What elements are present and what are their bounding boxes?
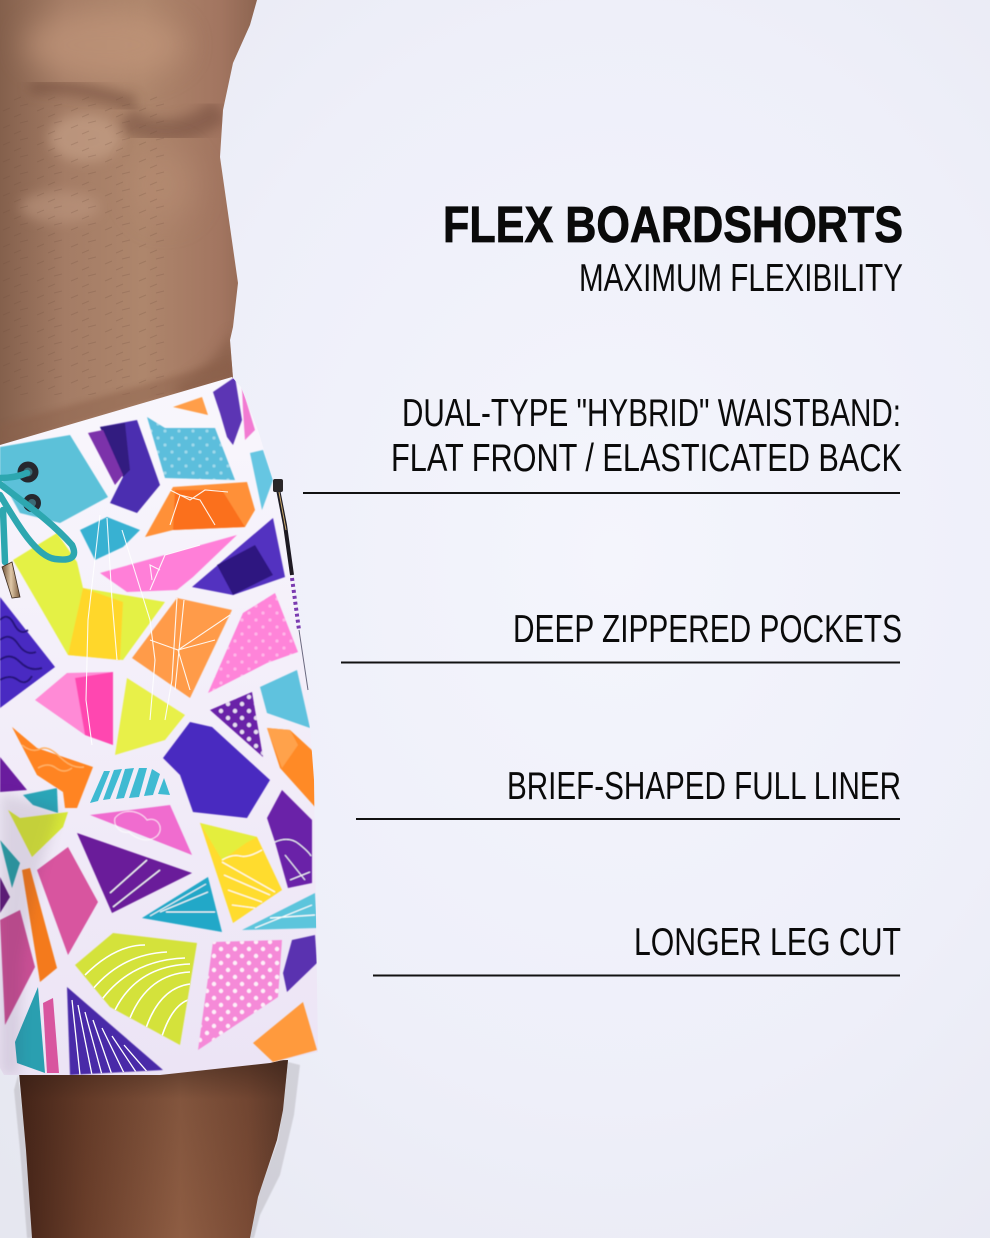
boardshorts [0, 377, 318, 1075]
eyelets [18, 462, 41, 512]
drawstring metal tip [2, 562, 20, 598]
zipper pocket [273, 479, 308, 690]
center seam shadow [0, 792, 60, 1075]
feature: leg cut: LONGER LEG CUT [634, 921, 901, 964]
shorts base fabric [0, 377, 318, 1075]
shorts print panels [0, 377, 317, 1075]
title: FLEX BOARDSHORTS [443, 196, 903, 253]
model torso [0, 0, 260, 450]
stripes patch [90, 768, 170, 803]
feature: hybrid waistband [303, 392, 902, 494]
model leg [19, 1060, 288, 1238]
drawstring [0, 473, 74, 562]
leg hair fringe [14, 1062, 300, 1238]
palm line art [86, 490, 230, 745]
